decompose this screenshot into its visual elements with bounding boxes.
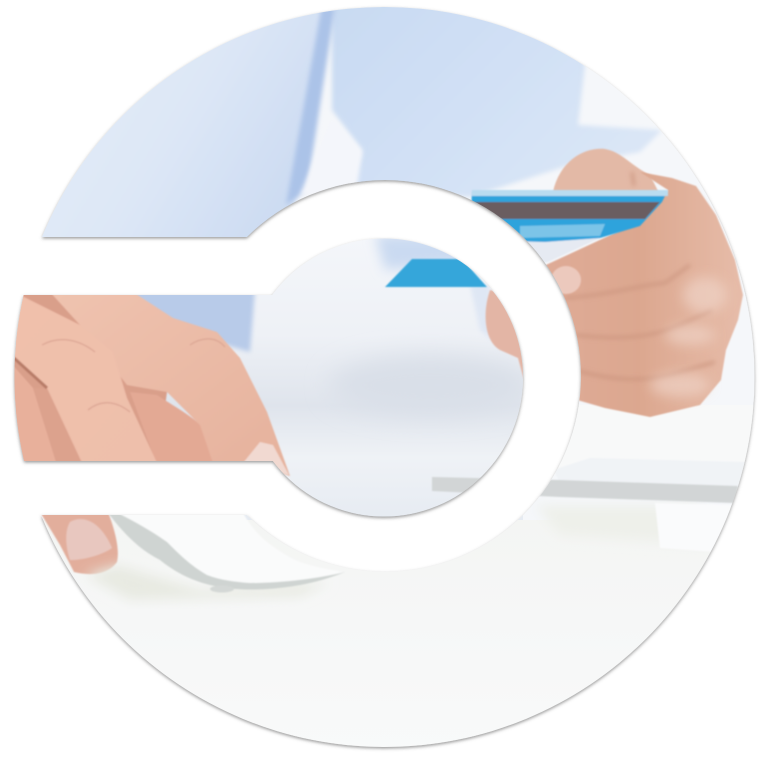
shirt right side <box>332 0 662 197</box>
pinky finger <box>14 368 56 461</box>
card body <box>470 190 668 242</box>
mouse foot <box>210 586 234 592</box>
credit card <box>470 190 668 266</box>
shadow between fingers <box>14 358 47 388</box>
soft white gap by placket <box>299 152 363 195</box>
keyboard <box>432 458 745 552</box>
card highlight <box>472 190 668 196</box>
right hand <box>486 149 743 417</box>
keyboard keys <box>553 458 745 487</box>
shirt lower part behind hand <box>136 295 257 353</box>
shirt placket <box>286 5 335 205</box>
thumb <box>553 149 660 195</box>
shirt <box>20 0 662 352</box>
mouse top <box>118 513 345 583</box>
mouse silver body <box>108 513 345 590</box>
keyboard silver edge <box>432 477 738 503</box>
mouse shadow <box>85 565 330 600</box>
card text band <box>520 224 605 238</box>
hand body <box>535 172 743 417</box>
middle finger <box>14 292 158 465</box>
grey blur in the disc <box>345 355 514 396</box>
small finger in disc <box>484 290 523 378</box>
thumb nail <box>66 519 112 560</box>
knuckle highlights <box>650 277 727 397</box>
keyboard stand <box>655 503 732 552</box>
table shadow under keyboard <box>544 505 658 536</box>
lower thumb <box>40 512 118 574</box>
shirt left side <box>42 12 322 237</box>
finger creases <box>565 172 715 379</box>
third finger <box>132 393 214 461</box>
skin underlay <box>14 295 168 453</box>
left hand <box>10 292 290 574</box>
magnetic stripe <box>470 202 660 219</box>
index finger <box>50 292 290 476</box>
mouse <box>85 513 345 600</box>
ring finger <box>33 388 83 465</box>
blue card behind <box>385 259 487 287</box>
knuckle creases <box>42 339 225 412</box>
fingernail <box>551 266 581 294</box>
card white lower edge <box>526 237 600 262</box>
shirt seen through ring <box>372 238 457 274</box>
index fingernail <box>243 442 289 475</box>
